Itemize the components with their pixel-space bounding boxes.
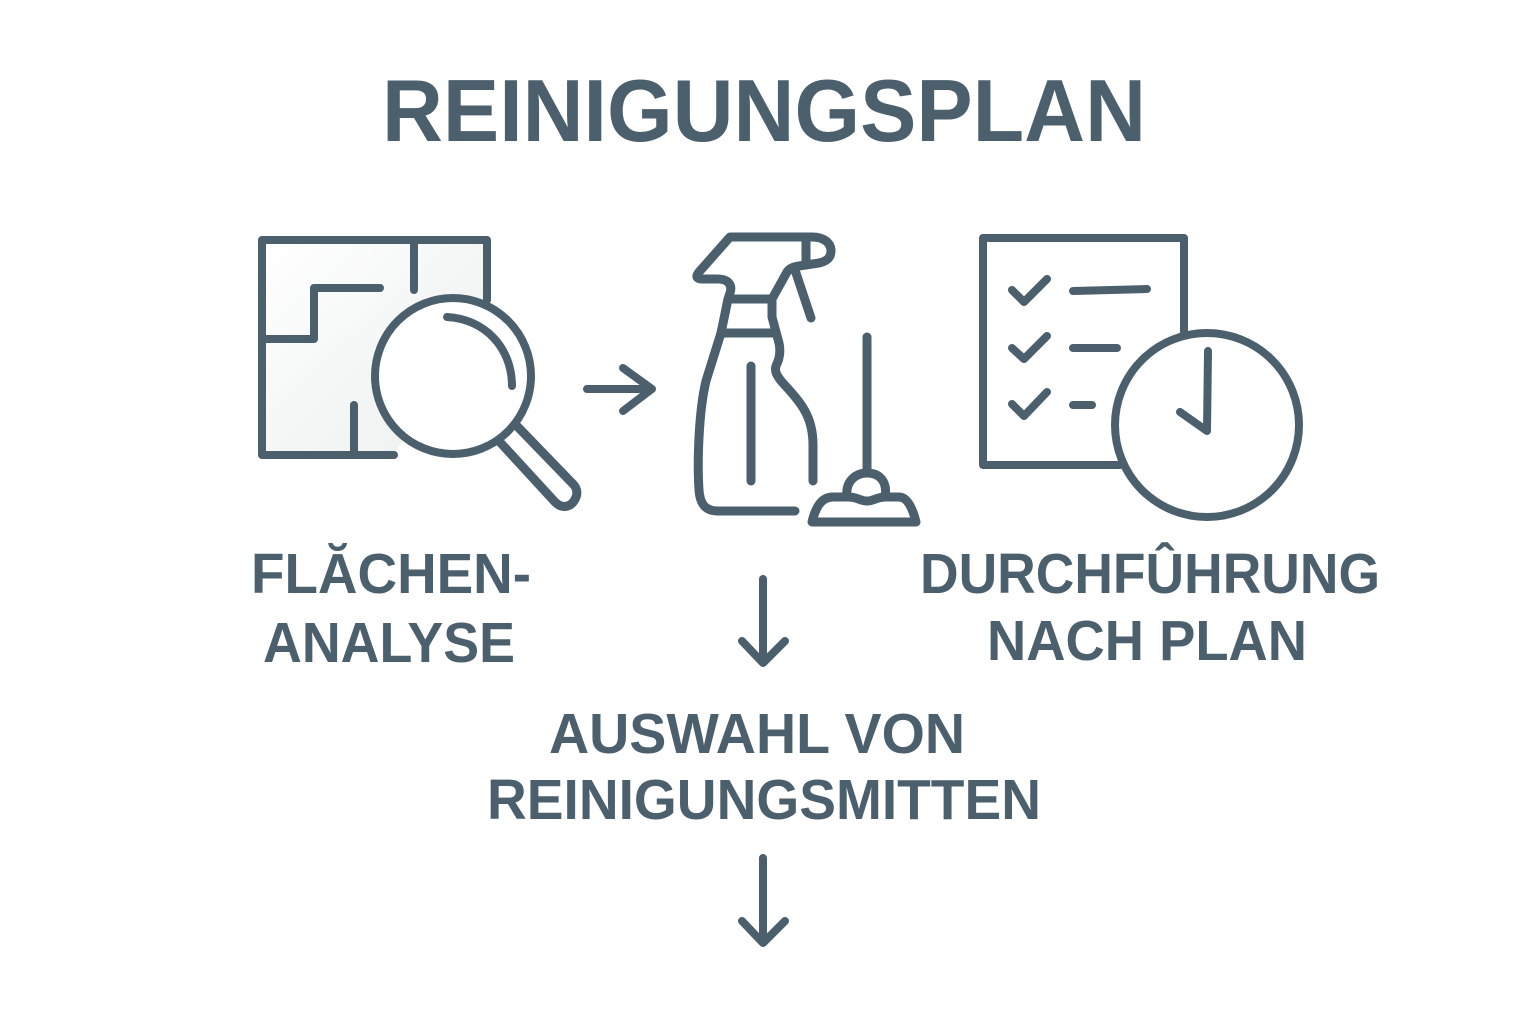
icon: spray bottle and mop: [697, 237, 916, 522]
icon: checklist with clock: [983, 238, 1299, 517]
label: Flächenanalyse: [251, 542, 531, 675]
label: Durchführung nach Plan: NACH PLAN: [987, 609, 1307, 673]
arrow: down to product selection: [742, 579, 785, 663]
arrow: analysis to products: [587, 368, 652, 411]
label: Durchführung nach Plan: [920, 541, 1380, 673]
label: Auswahl von Reinigungsmitteln: REINIGUNGSMITTEN: [487, 768, 1041, 832]
label: Durchführung nach Plan: DURCHFÛHRUNG: [920, 541, 1380, 606]
label: Auswahl von Reinigungsmitteln: AUSWAHL VON: [549, 702, 965, 766]
label: Flächenanalyse: ANALYSE: [263, 611, 515, 675]
label: Flächenanalyse: FLĂCHEN-: [251, 542, 531, 606]
icon: floor plan with magnifying glass: [262, 240, 577, 506]
title: REINIGUNGSPLAN: [382, 61, 1146, 160]
label: Auswahl von Reinigungsmitteln: [487, 702, 1041, 832]
arrow: down to next step: [742, 858, 785, 943]
